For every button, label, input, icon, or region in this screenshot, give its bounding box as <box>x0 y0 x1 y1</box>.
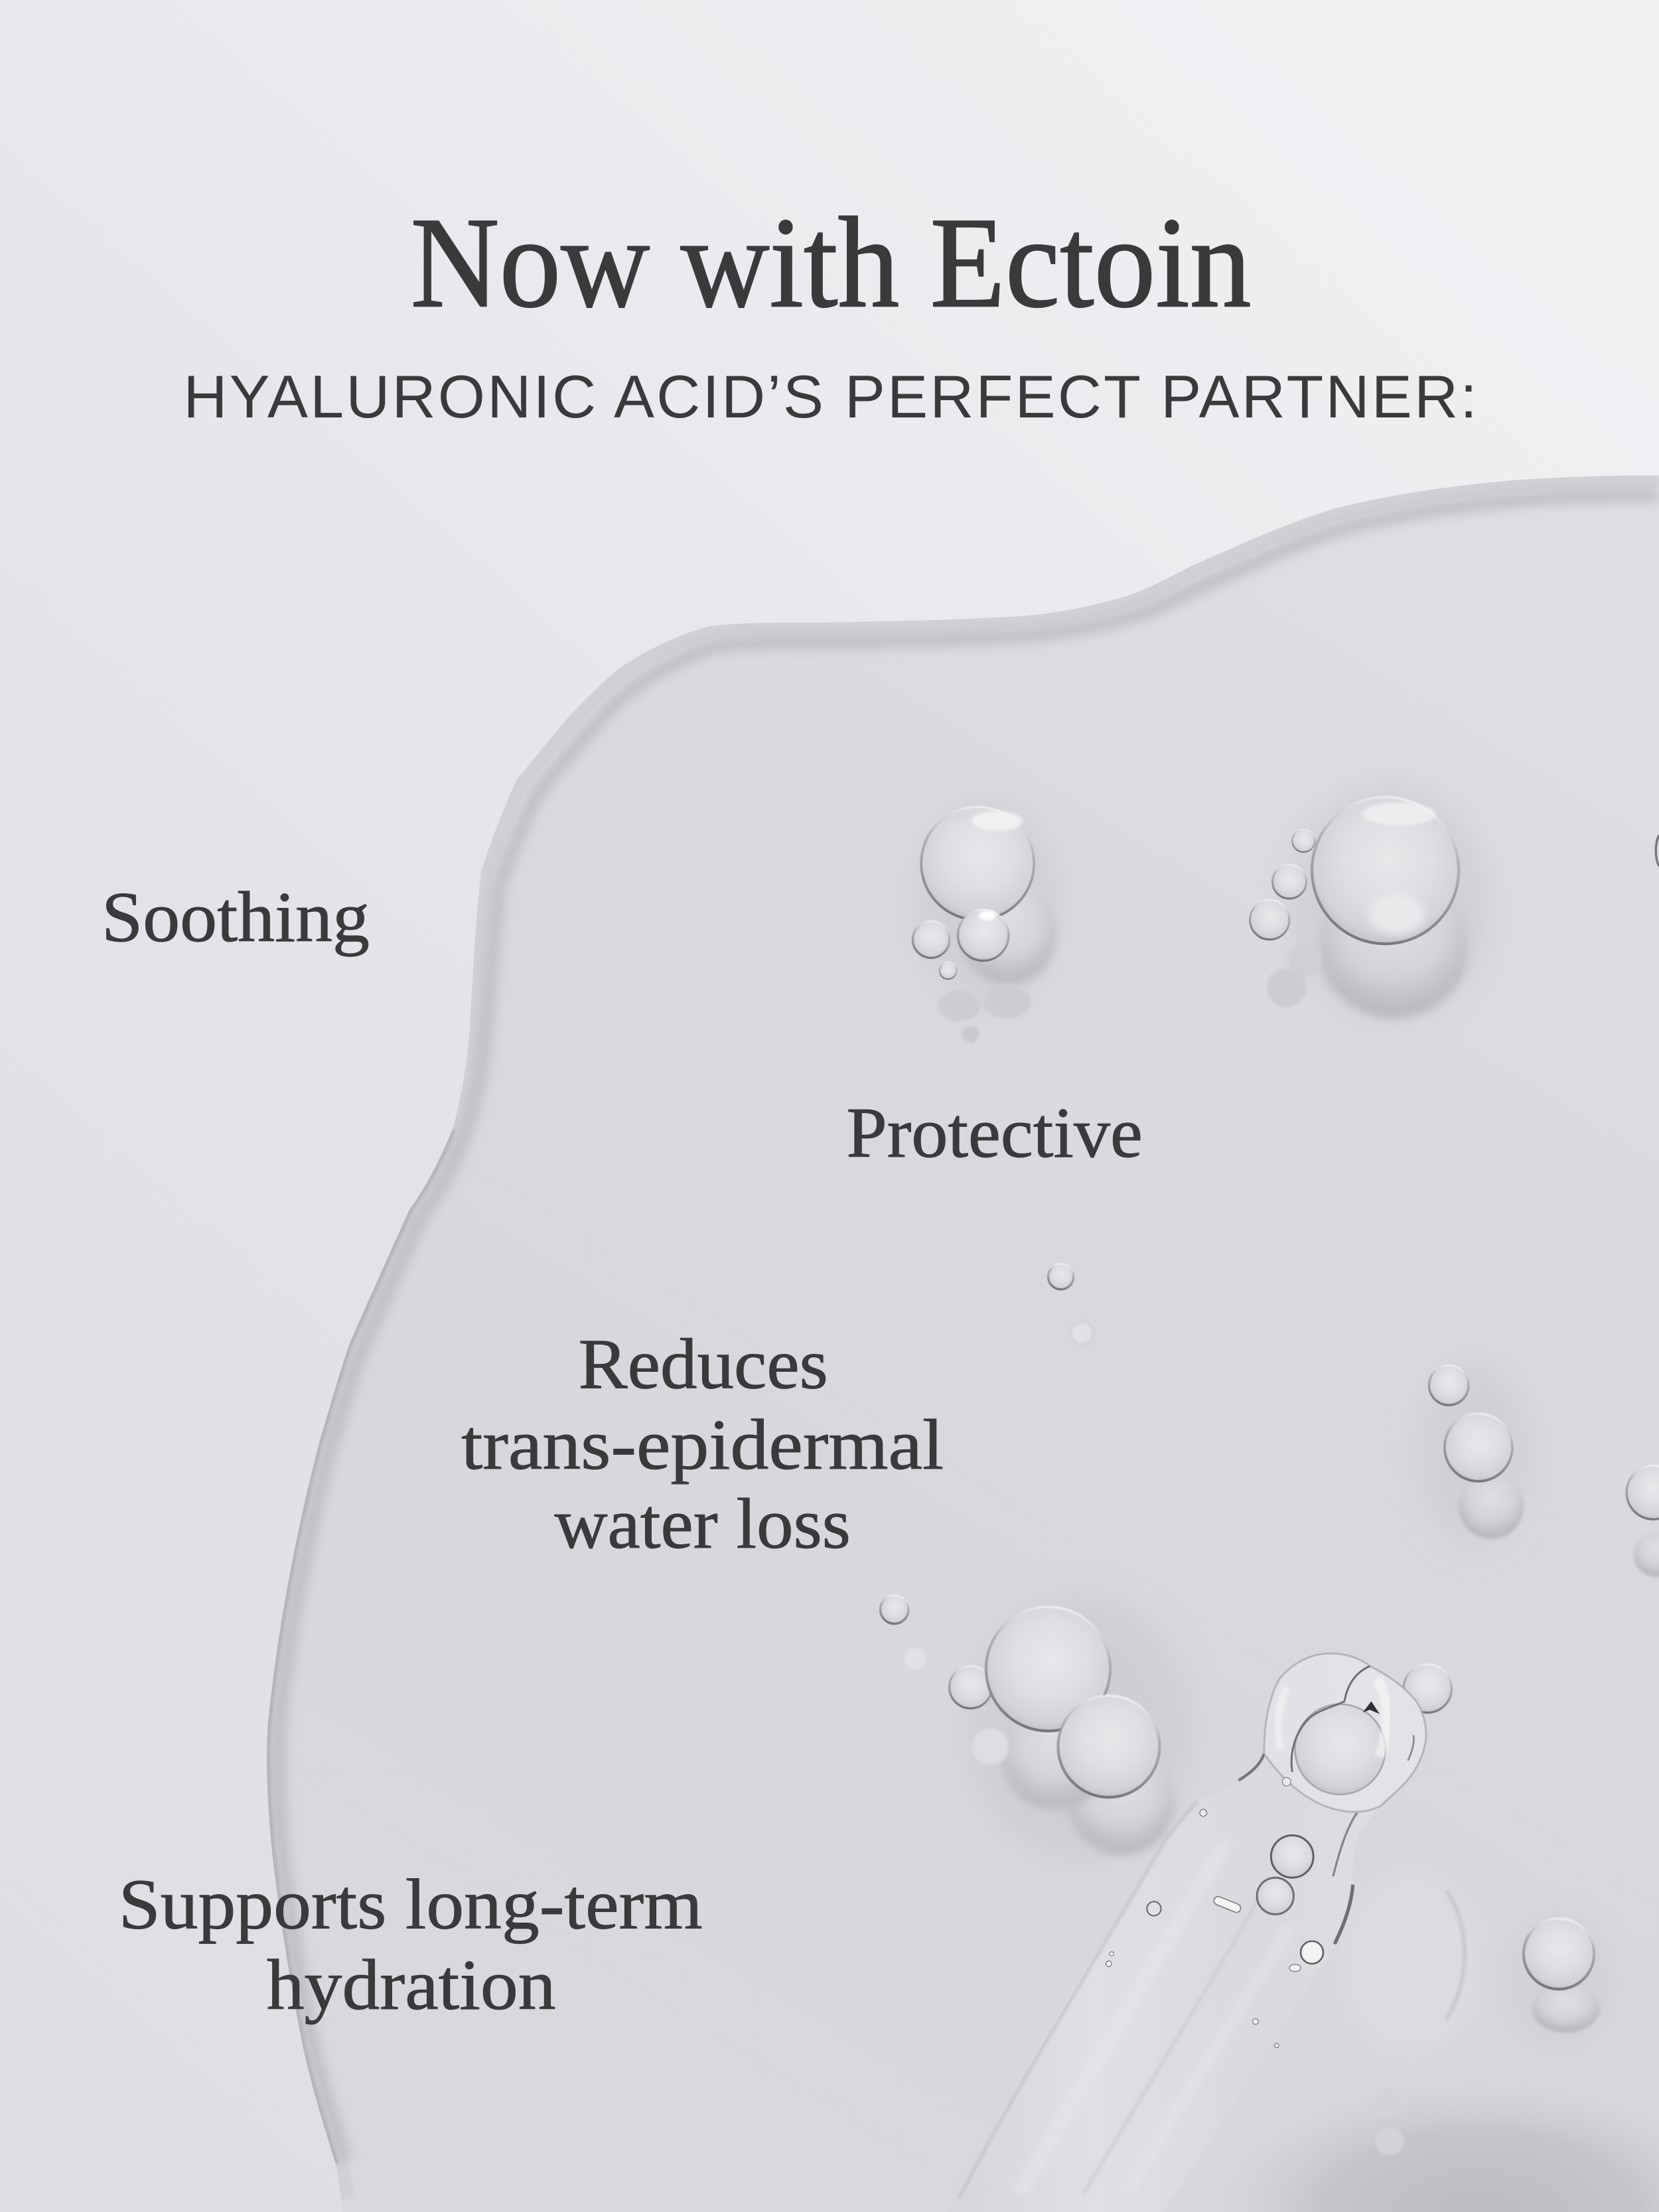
dropper bulb <box>1264 1653 1426 1812</box>
label: supports long-term hydration: Supports long-term <box>119 1865 703 1945</box>
label: supports long-term hydration <box>119 1865 703 2025</box>
bubble cluster: lower left of dropper <box>881 1595 1192 1861</box>
label: reduces trans-epidermal water loss: water loss <box>554 1484 851 1564</box>
label: soothing: Soothing <box>102 877 370 957</box>
subtitle: HYALURONIC ACID’S PERFECT PARTNER: <box>183 363 1477 431</box>
bubble cluster: upper left <box>912 801 1061 1043</box>
bubble cluster: lower right <box>1343 1664 1613 2156</box>
serum pool <box>254 465 1659 2212</box>
label: supports long-term hydration: hydration <box>267 1945 556 2025</box>
bubble cluster: upper right <box>1250 784 1491 1021</box>
bubbles inside dropper <box>1106 1777 1323 2047</box>
bubble: right edge top <box>1656 835 1659 866</box>
bubbles: centre pair <box>1048 1264 1094 1345</box>
label: protective: Protective <box>847 1093 1143 1173</box>
glass dropper <box>950 1653 1426 2212</box>
bubble cluster: right edge <box>1626 1466 1659 1577</box>
label: reduces trans-epidermal water loss <box>461 1325 944 1564</box>
title: Now with Ectoin <box>411 191 1252 334</box>
label: reduces trans-epidermal water loss: Reduces <box>579 1325 828 1404</box>
dropper tube highlights <box>960 1753 1357 2198</box>
label: reduces trans-epidermal water loss: trans-epidermal <box>461 1405 944 1485</box>
bubble cluster: middle right <box>1417 1360 1531 1546</box>
